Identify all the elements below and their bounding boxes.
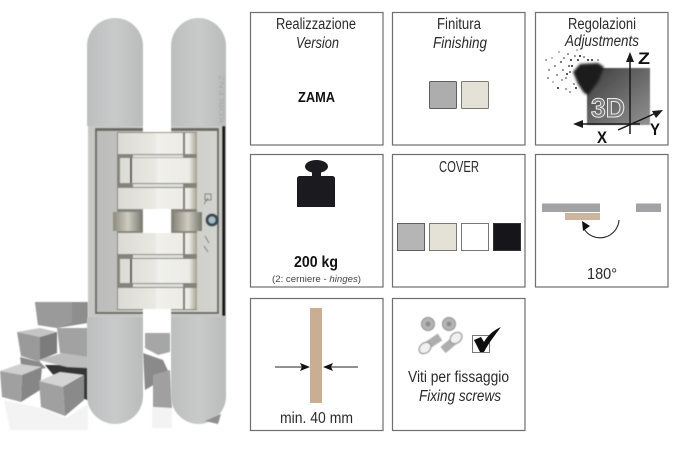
frame bar right [636,204,661,212]
swatch: white [462,224,488,250]
caption: Viti per fissaggio: Viti per fissaggio [408,369,509,386]
cube reflection [4,400,88,430]
icon: weight [297,160,335,207]
plate brand mark: KOBLENZ [217,74,226,123]
panel: adjustments [536,12,668,147]
scale marks [204,194,211,204]
panel: door thickness [250,298,383,430]
swatch: grey [430,82,456,108]
metal cubes [0,302,172,430]
particles [545,49,604,95]
icon: checkbox [472,327,501,352]
rotation arrow [582,220,619,238]
swatch: cream [462,82,488,108]
axis label Y: Y [650,120,661,139]
bottom left plate [87,317,143,424]
swatch: cream [430,224,456,250]
panel: opening angle [536,154,668,287]
icon: 3D cube [545,49,663,147]
swatch: grey [398,224,424,250]
value: min. 40 mm: min. 40 mm [280,410,353,427]
axis label Z: Z [638,49,650,68]
value: 200 kg: 200 kg [294,254,338,271]
heading: Finishing: Finishing [433,35,487,52]
arrow left [275,363,310,371]
hinge body frame [88,126,226,318]
heading: Regolazioni: Regolazioni [568,16,636,33]
value: ZAMA: ZAMA [298,90,335,106]
panel: weight [250,154,383,287]
heading: Adjustments: Adjustments [564,33,639,50]
arrow right [323,363,358,371]
hinge [87,18,226,424]
heading: Realizzazione: Realizzazione [276,16,356,33]
white gap top [143,126,171,132]
heading: Version: Version [296,35,339,52]
value: 180°: 180° [587,266,617,283]
door frame bar [542,204,600,212]
icon: screws [417,318,464,356]
note: (2: cerniere - hinges) [272,274,361,285]
panel: fixing screws [392,298,525,430]
axis arrows [573,52,663,134]
top left plate [87,18,143,126]
door section [310,308,322,403]
caption: Fixing screws: Fixing screws [419,388,501,405]
3D label: 3D [591,93,625,123]
door leaf [565,213,600,220]
panel: version [250,12,383,145]
panel: cover [392,154,525,287]
axis label X: X [597,128,608,147]
adjustment screw [206,214,218,226]
heading: COVER: COVER [439,159,479,176]
central pins [113,212,143,231]
heading: Finitura: Finitura [437,16,481,33]
top right plate [171,18,226,126]
central window [143,209,171,233]
panel: finishing [392,12,525,145]
bottom right plate [171,317,226,424]
knuckles [118,133,197,309]
swatch: black [494,224,520,250]
